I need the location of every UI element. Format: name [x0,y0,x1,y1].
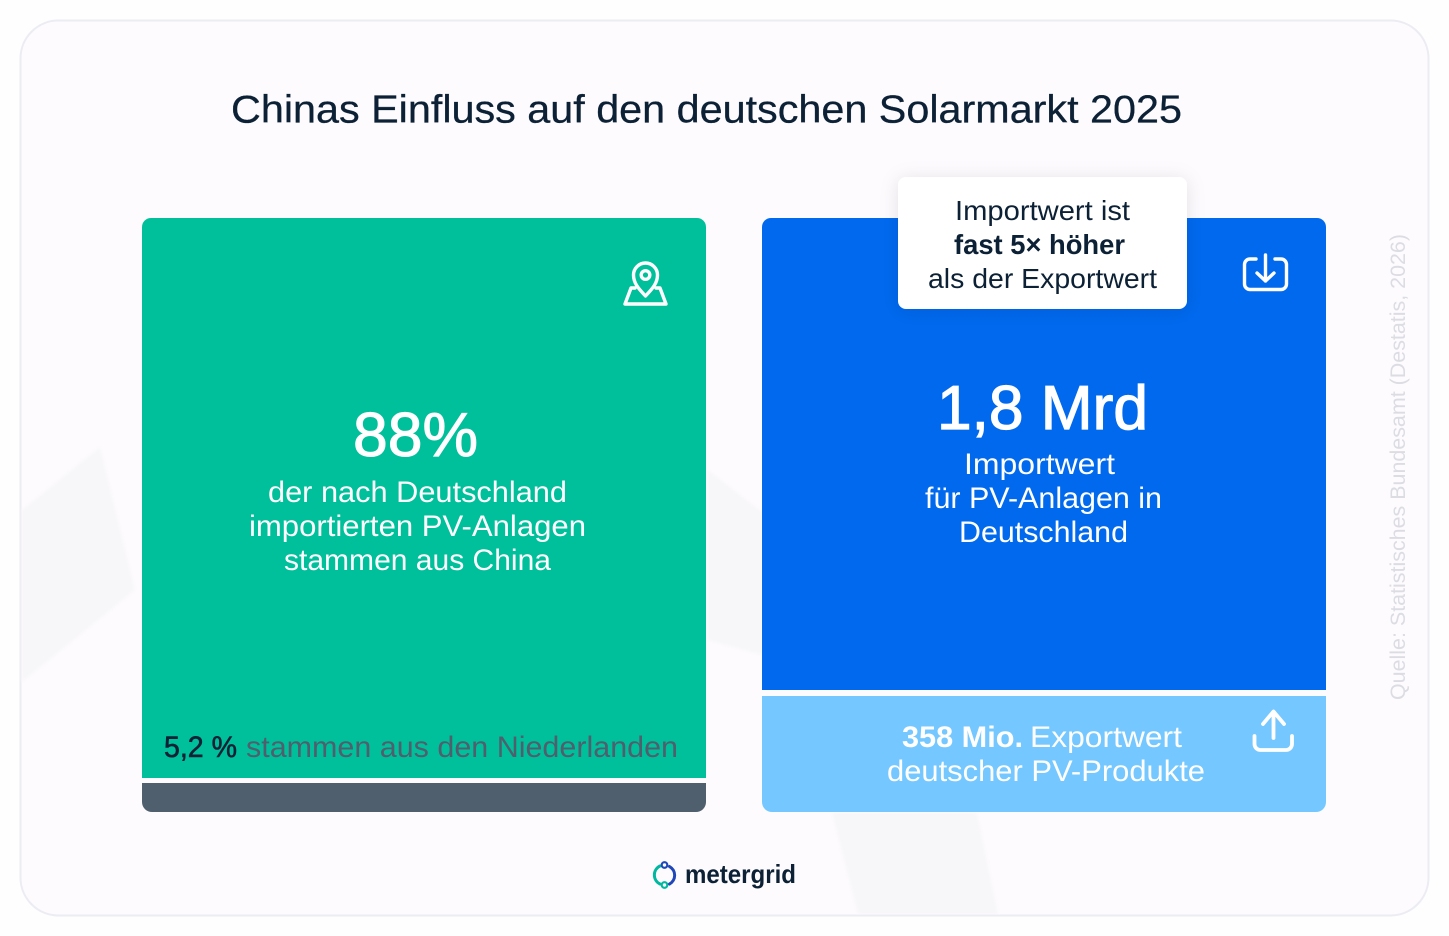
text: import value description: für PV-Anlagen in [925,482,1162,515]
text: import value description [925,448,1162,549]
icon: logo mark [654,862,675,888]
text: description of China share: importierten PV-Anlagen [249,510,586,543]
icon: download [1244,255,1286,290]
text: Netherlands share: 5,2 % [164,731,237,764]
text: description of China share: stammen aus China [284,544,551,577]
text: description of China share: der nach Deutschland [268,476,567,509]
light blue bar: export value [762,696,1326,812]
source note: Quelle: Statistisches Bundesamt (Destatis, 2026) [1387,234,1410,700]
panel: China share of imports [142,218,706,812]
statistic: 1,8 Mrd: 1,8 Mrd [937,374,1148,443]
text: export value description [887,721,1205,788]
logo: metergrid [654,859,796,889]
text: import value description: Deutschland [959,516,1128,549]
icon: upload [1254,712,1292,750]
callout: import value vs export value: Importwert ist [955,195,1130,226]
blue bar: import value [762,218,1326,690]
text: export value description: Exportwert [1030,721,1183,754]
text: import value description: Importwert [964,448,1116,481]
text: export value description: deutscher PV-Produkte [887,755,1205,788]
grey bar: Netherlands share [142,783,706,812]
callout: import value vs export value: als der Exportwert [928,263,1157,294]
callout: import value vs export value: fast 5× höher [954,229,1125,260]
callout: import value vs export value [898,177,1187,309]
panel: import and export value [762,177,1326,812]
statistic: 88%: 88% [353,401,478,470]
green bar: 88 percent [142,218,706,778]
icon: map pin [625,263,666,304]
text: description of China share [249,476,586,577]
title: Chinas Einfluss auf den deutschen Solarmarkt 2025 [231,88,1182,132]
text: Netherlands share: stammen aus den Niederlanden [246,731,678,764]
text: export value description: 358 Mio. [902,721,1023,754]
wordmark: metergrid [685,859,796,889]
